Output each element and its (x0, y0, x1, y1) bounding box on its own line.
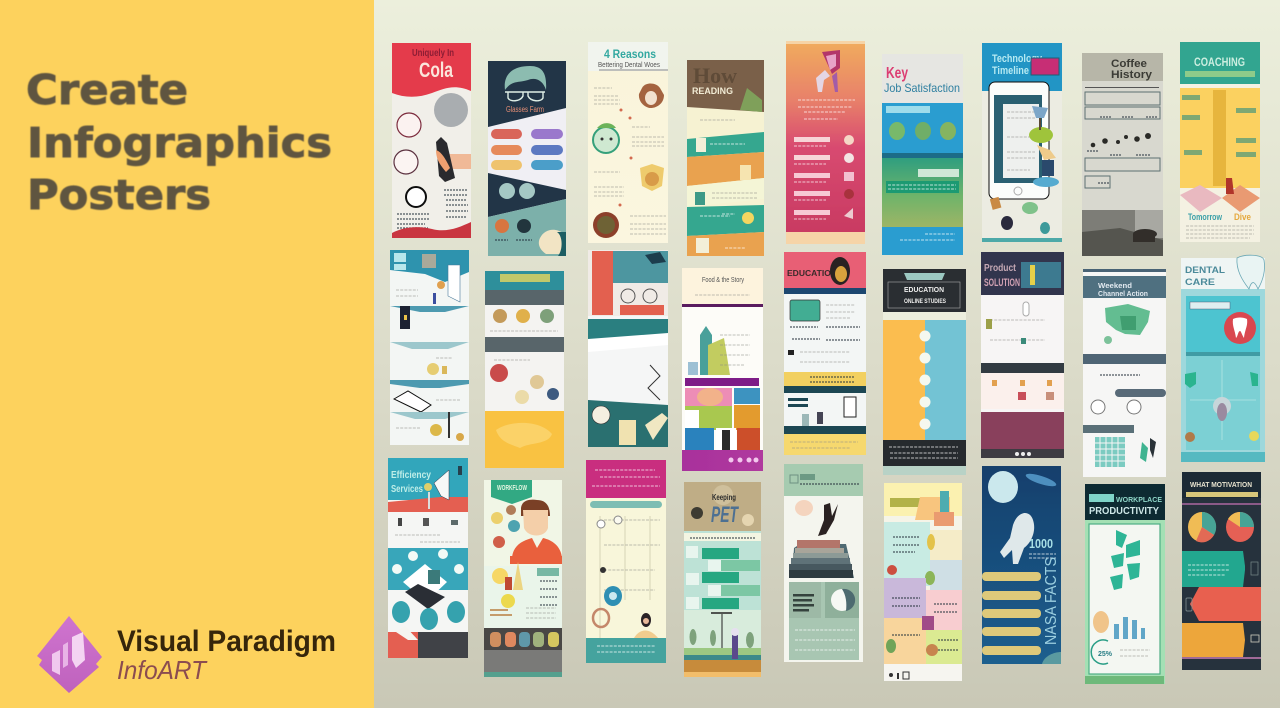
poster: pink header tablet (784, 252, 866, 455)
poster: technology phone: Timeline (992, 65, 1029, 77)
poster: dark title orange blue: EDUCATION (904, 287, 944, 294)
poster: online safety (390, 250, 469, 445)
poster: efficiency services: Services (391, 484, 423, 495)
poster: pet: PET (711, 502, 739, 527)
poster: efficiency services: Efficiency (391, 470, 431, 481)
poster: glasses: Glasses Farm (506, 105, 544, 114)
poster: world yellow (485, 271, 564, 468)
poster: efficiency services (388, 458, 468, 658)
poster: pink header tablet: EDUCATION (787, 269, 837, 278)
poster: pastel food (884, 483, 962, 681)
title: Infographics (27, 119, 332, 167)
poster: how reading: READING (692, 86, 733, 96)
poster: technology phone: Technology (992, 53, 1043, 65)
poster: key job satisfaction: Key (886, 65, 908, 82)
poster: key job satisfaction (882, 54, 963, 255)
poster: usa map (1083, 269, 1166, 477)
poster: NASA facts: 1000 (1029, 536, 1053, 551)
poster: usa map: Channel Action (1098, 291, 1148, 298)
poster: four reasons pets (588, 42, 668, 243)
poster: dark title orange blue: ONLINE STUDIES (904, 299, 946, 305)
icon: purple diamond with bars (37, 616, 102, 693)
poster: usa map: Weekend (1098, 283, 1132, 290)
poster: pet (684, 482, 761, 677)
poster gallery (388, 41, 1265, 684)
poster: technology phone (982, 43, 1062, 242)
poster: dark pies (1182, 472, 1261, 670)
poster: man red shirt (484, 480, 562, 677)
poster: four reasons pets: Bettering Dental Woes (598, 62, 660, 69)
poster: workplace productivity (1085, 484, 1165, 684)
poster: social stats dark: Product (984, 263, 1017, 274)
poster: four reasons pets: 4 Reasons (604, 47, 656, 61)
poster: pyramid (784, 464, 863, 662)
poster: cola: Cola (419, 59, 453, 82)
poster: cola (392, 43, 471, 238)
poster: dark pies: WHAT MOTIVATION (1190, 482, 1252, 489)
poster: coffee history: History (1111, 69, 1153, 81)
poster: coffee history (1082, 53, 1163, 256)
logo wordmark: Visual Paradigm (117, 625, 336, 658)
poster: workplace productivity: 25% (1098, 651, 1113, 658)
poster: how reading (687, 60, 764, 256)
poster: dark title orange blue (883, 269, 966, 475)
poster: NASA facts (982, 466, 1061, 664)
poster: man red shirt: WORKFLOW (497, 485, 527, 492)
poster: coaching: Dive (1234, 212, 1251, 222)
poster: workplace productivity: PRODUCTIVITY (1089, 506, 1159, 517)
poster: how reading: How (693, 63, 737, 88)
poster: glasses (488, 61, 566, 256)
poster: NASA facts: NASA FACTS (1043, 557, 1060, 645)
poster: coffee history: Coffee (1111, 58, 1147, 70)
poster: purple mosaic: Food & the Story (702, 277, 744, 284)
logo subtitle: InfoART (117, 655, 208, 685)
poster: dental: CARE (1185, 277, 1215, 287)
poster: pink gradient (786, 41, 865, 244)
poster: coaching: COACHING (1194, 55, 1245, 69)
poster: coaching (1180, 42, 1260, 242)
poster: coaching: Tomorrow (1188, 212, 1223, 222)
poster: teal red tree (588, 250, 668, 447)
poster: key job satisfaction: Job Satisfaction (884, 81, 960, 95)
background wall (373, 0, 1280, 708)
title: Create (26, 66, 188, 114)
poster: pet: Keeping (712, 493, 736, 502)
poster: workplace productivity: WORKPLACE (1116, 497, 1162, 504)
title: Posters (27, 171, 211, 219)
poster: magenta flow (586, 460, 666, 663)
poster: social stats dark (981, 252, 1064, 458)
poster: dental: DENTAL (1185, 265, 1226, 275)
poster: social stats dark: SOLUTION (984, 277, 1020, 289)
logo: Visual Paradigm InfoART (37, 616, 336, 693)
title (26, 66, 332, 219)
poster: dental (1181, 255, 1265, 462)
yellow side panel (0, 0, 374, 708)
poster: cola: Uniquely In (412, 48, 454, 59)
poster: purple mosaic (682, 268, 763, 471)
